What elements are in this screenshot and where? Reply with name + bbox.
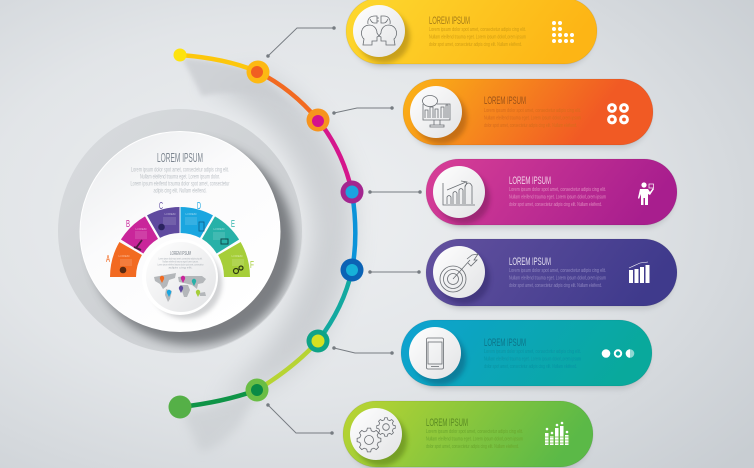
step 4 title: LOREM IPSUM bbox=[509, 256, 551, 268]
step 1 body: Nullam eleifend trauma eget. Lorem ipsum dolorLorem ipsum bbox=[429, 34, 526, 40]
segment labels: B bbox=[126, 219, 130, 230]
icon: four donuts bbox=[609, 105, 627, 123]
step 6 title: LOREM IPSUM bbox=[426, 417, 468, 429]
step 3 title: LOREM IPSUM bbox=[509, 175, 551, 187]
icon: equalizer bbox=[544, 422, 570, 445]
segment mini text bbox=[118, 212, 243, 258]
timeline node 1 bbox=[246, 60, 270, 84]
step 5 body bbox=[484, 349, 581, 370]
icon: growth chart bbox=[433, 166, 490, 224]
disc heading: LOREM IPSUM bbox=[157, 150, 203, 165]
panel: step 4 bbox=[426, 239, 677, 310]
step 5 body: Nullam eleifend trauma eget. Lorem ipsum dolorLorem ipsum bbox=[484, 356, 581, 362]
segment D bbox=[180, 207, 213, 238]
icon: chart monitor bbox=[410, 86, 467, 144]
semicircular segments A to F bbox=[106, 201, 254, 277]
icon: smartphone bbox=[409, 327, 466, 385]
connector 4 bbox=[369, 271, 420, 273]
connector 3 bbox=[369, 191, 421, 193]
step 2 body bbox=[484, 108, 581, 129]
timeline node 6 bbox=[246, 378, 268, 402]
icon: target and arrow bbox=[433, 246, 490, 304]
step 6 body bbox=[426, 429, 523, 450]
step 4 body bbox=[509, 268, 606, 289]
map disc body text: adipis cing elit. bbox=[168, 266, 193, 270]
map disc body text: Lorem ipsum dolor spot amet, consectetur adipis cing elit. bbox=[158, 256, 203, 260]
panel: step 5 bbox=[401, 320, 652, 390]
arc cast shadow bbox=[200, 72, 354, 405]
icon: dot matrix bbox=[552, 21, 574, 43]
icon: three dots bbox=[602, 349, 634, 358]
disc body text: Nullam eleifend trauma eget. Lorem ipsum dolor. bbox=[140, 174, 220, 180]
segment mini text: LOREM bbox=[214, 227, 225, 231]
step 6 body: Nullam eleifend trauma eget. Lorem ipsum dolorLorem ipsum bbox=[426, 436, 523, 442]
segment mini text: LOREM bbox=[164, 212, 176, 216]
segment labels: C bbox=[159, 201, 163, 212]
icon: two heads and plug bbox=[353, 5, 410, 63]
panel: step 3 bbox=[426, 159, 677, 229]
step 2 body: Lorem ipsum dolor spot amet, consectetur adipis cing elit. bbox=[484, 108, 581, 114]
segment mini text: LOREM bbox=[118, 254, 130, 258]
timeline start dot bbox=[174, 48, 186, 62]
timeline node 3 bbox=[340, 180, 364, 204]
step 6 body: dolor spot amet, consectetur adipis cing elit. Nullam eleifend. bbox=[426, 444, 519, 450]
curved timeline bbox=[180, 55, 355, 407]
world map bbox=[154, 273, 206, 302]
segment mini text: LOREM bbox=[136, 227, 147, 231]
disc body text bbox=[130, 168, 230, 194]
segment E bbox=[202, 216, 239, 254]
segment labels: E bbox=[231, 219, 235, 230]
segment labels: D bbox=[197, 201, 201, 212]
connector 1 bbox=[267, 27, 335, 57]
step 4 body: dolor spot amet, consectetur adipis cing elit. Nullam eleifend. bbox=[509, 283, 602, 289]
segment B bbox=[121, 216, 158, 254]
icon: bar chart bbox=[629, 262, 650, 283]
map pins bbox=[160, 276, 200, 297]
map disc body text: Nullam eleifend trauma eget lorem ipsum. bbox=[162, 260, 199, 264]
icon: gears bbox=[350, 408, 407, 466]
disc body text: Lorem ipsum dolor spot amet, consectetur adipis cing elit. bbox=[131, 168, 229, 174]
panel: step 6 bbox=[343, 401, 593, 468]
map disc heading: LOREM IPSUM bbox=[170, 251, 191, 257]
map disc body text: Lorem ipsum eleifend trauma dolor spot amet, consectetur bbox=[158, 262, 204, 266]
step 2 body: dolor spot amet, consectetur adipis cing elit. Nullam eleifend. bbox=[484, 123, 577, 129]
segment A bbox=[110, 242, 142, 277]
step 5 title: LOREM IPSUM bbox=[484, 337, 526, 349]
connector 5 bbox=[333, 347, 393, 354]
timeline node 2 bbox=[306, 108, 330, 132]
panel: step 1 bbox=[346, 0, 597, 68]
step 3 body: dolor spot amet, consectetur adipis cing elit. Nullam eleifend. bbox=[509, 202, 602, 208]
segment mini text: LOREM bbox=[186, 212, 197, 216]
panel: central circle bbox=[58, 109, 302, 353]
segment labels: F bbox=[250, 260, 254, 271]
top arc shadow tail bbox=[182, 58, 300, 115]
timeline end dot bbox=[168, 396, 192, 418]
segment C bbox=[147, 207, 180, 238]
connector 2 bbox=[333, 107, 393, 114]
outer grey ring bbox=[58, 109, 302, 353]
step 6 body: Lorem ipsum dolor spot amet, consectetur adipis cing elit. bbox=[426, 429, 523, 435]
timeline node 5 bbox=[306, 330, 330, 352]
step 2 title: LOREM IPSUM bbox=[484, 95, 526, 107]
white disc bbox=[80, 132, 280, 332]
segment mini text: LOREM bbox=[232, 254, 243, 258]
connector 6 bbox=[267, 404, 333, 434]
segment mini icons bbox=[120, 217, 244, 274]
step 5 body: dolor spot amet, consectetur adipis cing elit. Nullam eleifend. bbox=[484, 364, 577, 370]
step 3 body bbox=[509, 187, 606, 208]
connector arrows bbox=[267, 27, 421, 434]
step 1 body bbox=[429, 27, 526, 48]
step 3 body: Lorem ipsum dolor spot amet, consectetur adipis cing elit. bbox=[509, 187, 606, 193]
step 4 body: Nullam eleifend trauma eget. Lorem ipsum dolorLorem ipsum bbox=[509, 276, 606, 282]
step 4 body: Lorem ipsum dolor spot amet, consectetur adipis cing elit. bbox=[509, 268, 606, 274]
segment F bbox=[218, 242, 250, 277]
step 1 body: Lorem ipsum dolor spot amet, consectetur adipis cing elit. bbox=[429, 27, 526, 33]
icon: presenter bbox=[638, 182, 654, 205]
disc body text: adipis cing elit. Nullam eleifend. bbox=[154, 188, 207, 194]
disc body text: Lorem ipsum eleifend trauma dolor spot amet, consectetur bbox=[130, 182, 230, 188]
step 1 title: LOREM IPSUM bbox=[429, 15, 470, 27]
step 5 body: Lorem ipsum dolor spot amet, consectetur adipis cing elit. bbox=[484, 349, 581, 355]
inner map disc bbox=[142, 239, 222, 319]
bottom arc shadow tail bbox=[182, 392, 257, 452]
segment labels: A bbox=[106, 254, 110, 265]
timeline node 4 bbox=[340, 258, 364, 282]
panel: step 2 bbox=[403, 79, 653, 149]
segment labels bbox=[106, 201, 254, 271]
step 1 body: dolor spot amet, consectetur adipis cing elit. Nullam eleifend. bbox=[429, 42, 522, 48]
map disc body text bbox=[158, 256, 204, 270]
step 3 body: Nullam eleifend trauma eget. Lorem ipsum dolorLorem ipsum bbox=[509, 194, 606, 200]
step 2 body: Nullam eleifend trauma eget. Lorem ipsum dolorLorem ipsum bbox=[484, 116, 581, 122]
